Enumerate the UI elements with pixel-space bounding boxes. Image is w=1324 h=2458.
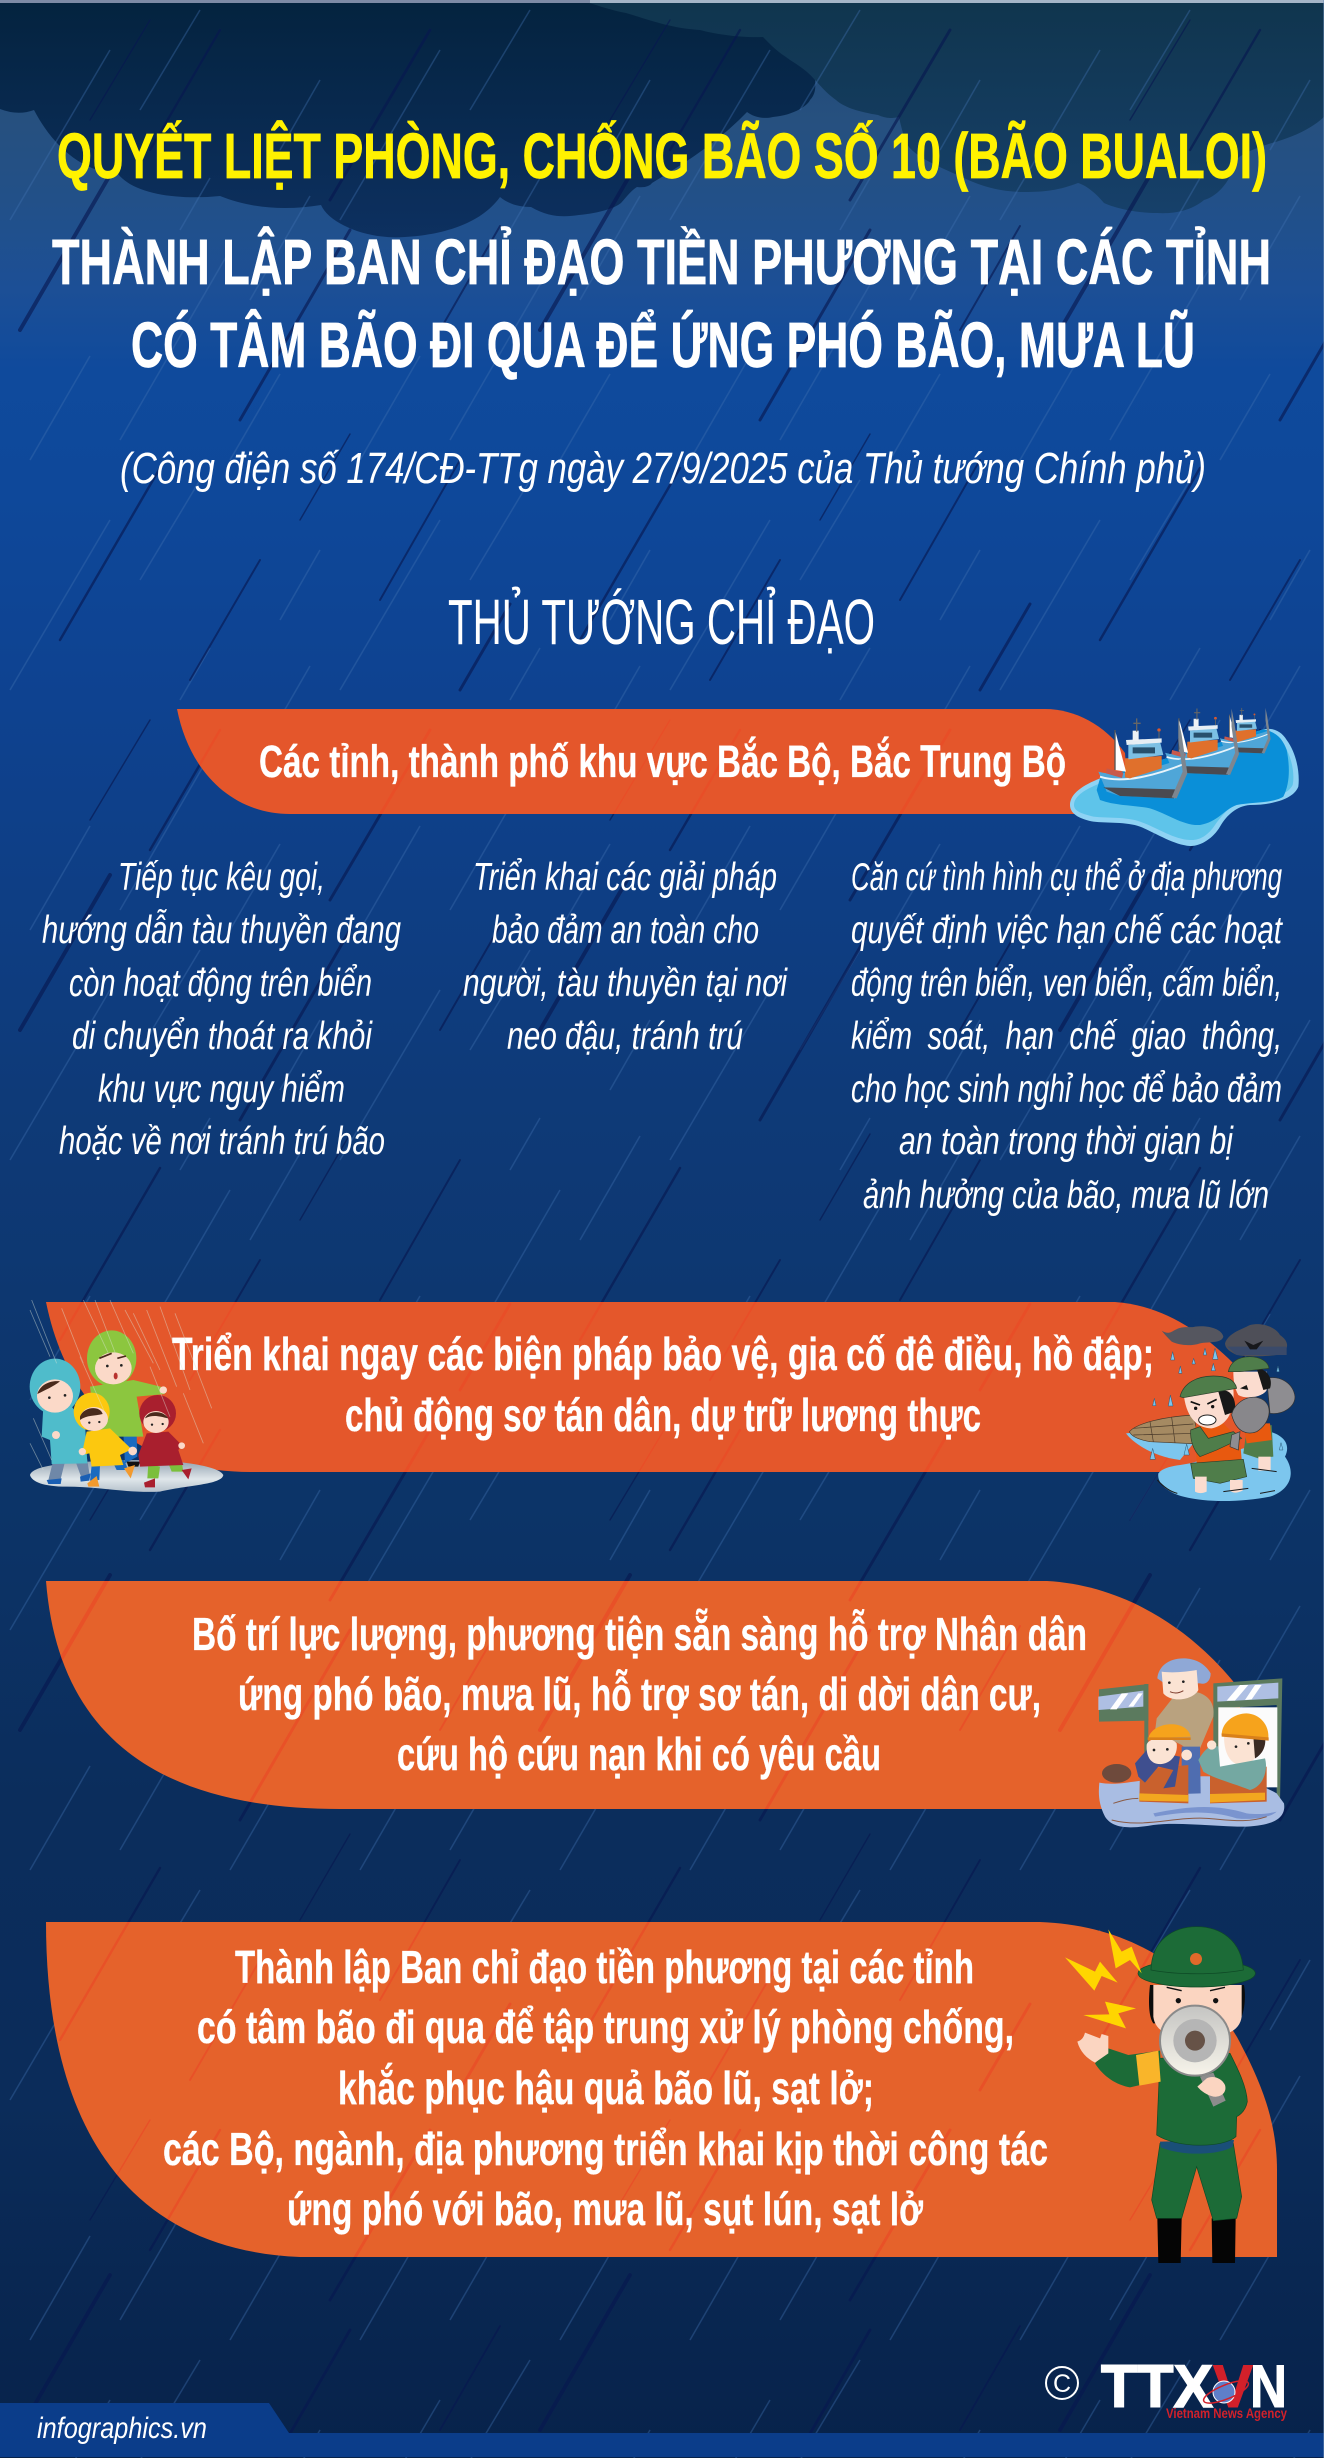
title: white headline <box>52 225 1271 381</box>
icon: children in raincoats <box>30 1300 223 1492</box>
icon: soldier with megaphone <box>1065 1927 1255 2263</box>
text column 2: Triển khai các giải pháp <box>473 856 777 899</box>
banner shapes <box>46 709 1277 2257</box>
text column 1: Tiếp tục kêu gọi, <box>118 856 325 899</box>
footer source: infographics.vn <box>37 2412 207 2445</box>
banner text: forward command: có tâm bão đi qua để tập trung xử lý phòng chống, <box>197 2001 1014 2053</box>
text column 2: neo đậu, tránh trú <box>507 1015 743 1058</box>
banner text: forces and means: cứu hộ cứu nạn khi có yêu cầu <box>397 1728 881 1780</box>
text column 1 <box>42 856 401 1163</box>
section heading: THỦ TƯỚNG CHỈ ĐẠO <box>448 585 875 658</box>
storm cloud left <box>0 3 815 237</box>
banner text: forward command: ứng phó với bão, mưa lũ, sụt lún, sạt lở <box>287 2183 923 2235</box>
banner text: forces and means: ứng phó bão, mưa lũ, hỗ trợ sơ tán, di dời dân cư, <box>238 1668 1041 1720</box>
banner text: forward command <box>163 1941 1048 2235</box>
icon: soldiers with sandbags <box>1126 1324 1295 1501</box>
banner text: forward command: Thành lập Ban chỉ đạo tiền phương tại các tỉnh <box>235 1941 974 1993</box>
logo: TTXVN <box>1101 2353 1287 2421</box>
text column 2 <box>463 856 788 1058</box>
icon: fishing boats <box>1070 708 1299 846</box>
text column 3 <box>851 856 1284 1217</box>
banner text: forces and means <box>192 1608 1087 1780</box>
text column 1: còn hoạt động trên biển <box>69 962 372 1005</box>
banner text: protective measures: chủ động sơ tán dân, dự trữ lương thực <box>345 1389 981 1441</box>
right edge line <box>1323 0 1324 2458</box>
logo: TTXVN: V <box>1213 2353 1253 2420</box>
banner text: northern provinces: Các tỉnh, thành phố khu vực Bắc Bộ, Bắc Trung Bộ <box>259 736 1066 787</box>
text column 1: di chuyển thoát ra khỏi <box>72 1015 373 1058</box>
text column 3: an toàn trong thời gian bị <box>899 1120 1234 1163</box>
banner text: forward command: khắc phục hậu quả bão lũ, sạt lở; <box>338 2062 874 2114</box>
storm cloud right <box>560 3 1324 213</box>
top edge strip <box>0 0 1324 3</box>
icon: flood rescue <box>1098 1658 1284 1827</box>
copyright symbol: C <box>1053 2370 1071 2398</box>
logo: TTXVN: TTX <box>1101 2353 1213 2420</box>
text column 2: người, tàu thuyền tại nơi <box>463 962 788 1005</box>
text column 1: hướng dẫn tàu thuyền đang <box>42 909 401 952</box>
text column 1: hoặc về nơi tránh trú bão <box>59 1120 385 1163</box>
logo: TTXVN: N <box>1250 2353 1287 2420</box>
logo: TTXVN: Vietnam News Agency <box>1166 2405 1287 2421</box>
banner text: protective measures <box>172 1328 1154 1441</box>
copyright symbol <box>1046 2367 1078 2399</box>
text column 1: khu vực nguy hiểm <box>98 1068 345 1111</box>
text column 2: bảo đảm an toàn cho <box>492 909 759 952</box>
footer bar <box>0 2403 1324 2457</box>
